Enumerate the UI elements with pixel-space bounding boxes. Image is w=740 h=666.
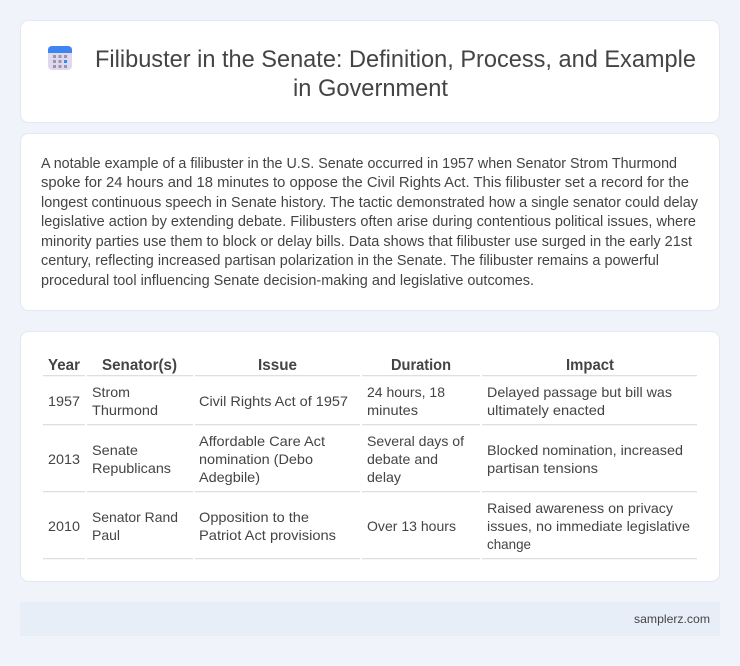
table row: 2010: Raised awareness on privacy bbox=[487, 500, 673, 516]
table row: 2010 bbox=[43, 500, 697, 559]
table row: 2010: Over 13 hours bbox=[367, 518, 456, 534]
table row: 1957 bbox=[43, 384, 697, 425]
table header: Senator(s) bbox=[102, 357, 177, 374]
panel: description bbox=[20, 134, 720, 310]
table row: 2010: change bbox=[487, 536, 531, 552]
table row: 2013: partisan tensions bbox=[487, 460, 598, 476]
title: in Government bbox=[293, 75, 448, 102]
text block: filibuster example: spoke for 24 hours and 18 minutes to oppose the Civil Rights Act. This filibuster set a record for the bbox=[41, 175, 689, 191]
table row: 2010: Patriot Act provisions bbox=[199, 527, 336, 543]
table header: Duration bbox=[391, 357, 451, 374]
table row: 2013: Adegbile) bbox=[199, 469, 260, 485]
table header: Issue bbox=[258, 357, 297, 374]
table row: 2013: Blocked nomination, increased bbox=[487, 442, 683, 458]
table row: 2013: Affordable Care Act bbox=[199, 433, 325, 449]
footer: samplerz.com bbox=[634, 612, 710, 626]
title: Filibuster in the Senate: Definition, Process, and Example bbox=[95, 46, 696, 73]
table header bbox=[43, 357, 697, 376]
text block: filibuster example: longest continuous speech in Senate history. The tactic demonstrated how a single senator could delay bbox=[41, 195, 699, 211]
table row: 2013: Republicans bbox=[92, 460, 171, 476]
title bbox=[95, 46, 696, 102]
table row: 2010: Paul bbox=[92, 527, 120, 543]
table row: 2013: 2013 bbox=[48, 451, 80, 467]
table header: Impact bbox=[566, 357, 615, 374]
footer bbox=[20, 602, 720, 636]
text block: filibuster example: A notable example of a filibuster in the U.S. Senate occurred in 1957 when Senator Strom Thurmond bbox=[41, 156, 677, 172]
table row: 2010: issues, no immediate legislative bbox=[487, 518, 690, 534]
panel: table bbox=[20, 332, 720, 582]
table row: 1957: Civil Rights Act of 1957 bbox=[199, 393, 348, 409]
text block: filibuster example: procedural tool influencing Senate decision-making and legislative outcomes. bbox=[41, 273, 534, 289]
panel: title card bbox=[20, 20, 720, 122]
table row: 1957: minutes bbox=[367, 402, 418, 418]
table header: Year bbox=[48, 357, 80, 374]
table row: 2013: Several days of bbox=[367, 433, 464, 449]
table row: 1957: 1957 bbox=[48, 393, 80, 409]
table row: 2013 bbox=[43, 433, 697, 492]
icon: calendar bbox=[48, 46, 72, 70]
table row: 2013: delay bbox=[367, 469, 401, 485]
text block: filibuster example bbox=[41, 156, 699, 289]
table row: 2010: Opposition to the bbox=[199, 509, 309, 525]
table row: 1957: ultimately enacted bbox=[487, 402, 605, 418]
table row: 1957: Delayed passage but bill was bbox=[487, 384, 672, 400]
table row: 2013: Senate bbox=[92, 442, 138, 458]
table row: 2013: debate and bbox=[367, 451, 438, 467]
text block: filibuster example: legislative action by extending debate. Filibusters often arise during contentious political issues, where bbox=[41, 214, 696, 230]
table row: 1957: 24 hours, 18 bbox=[367, 384, 445, 400]
table row: 2010: Senator Rand bbox=[92, 509, 178, 525]
text block: filibuster example: minority parties use them to block or delay bills. Data shows that filibuster use surged in the early 21st bbox=[41, 234, 692, 250]
table row: 2013: nomination (Debo bbox=[199, 451, 313, 467]
text block: filibuster example: century, reflecting increased partisan polarization in the Senate. The filibuster remains a powerful bbox=[41, 253, 659, 269]
table row: 2010: 2010 bbox=[48, 518, 80, 534]
table row: 1957: Strom bbox=[92, 384, 130, 400]
table row: 1957: Thurmond bbox=[92, 402, 158, 418]
